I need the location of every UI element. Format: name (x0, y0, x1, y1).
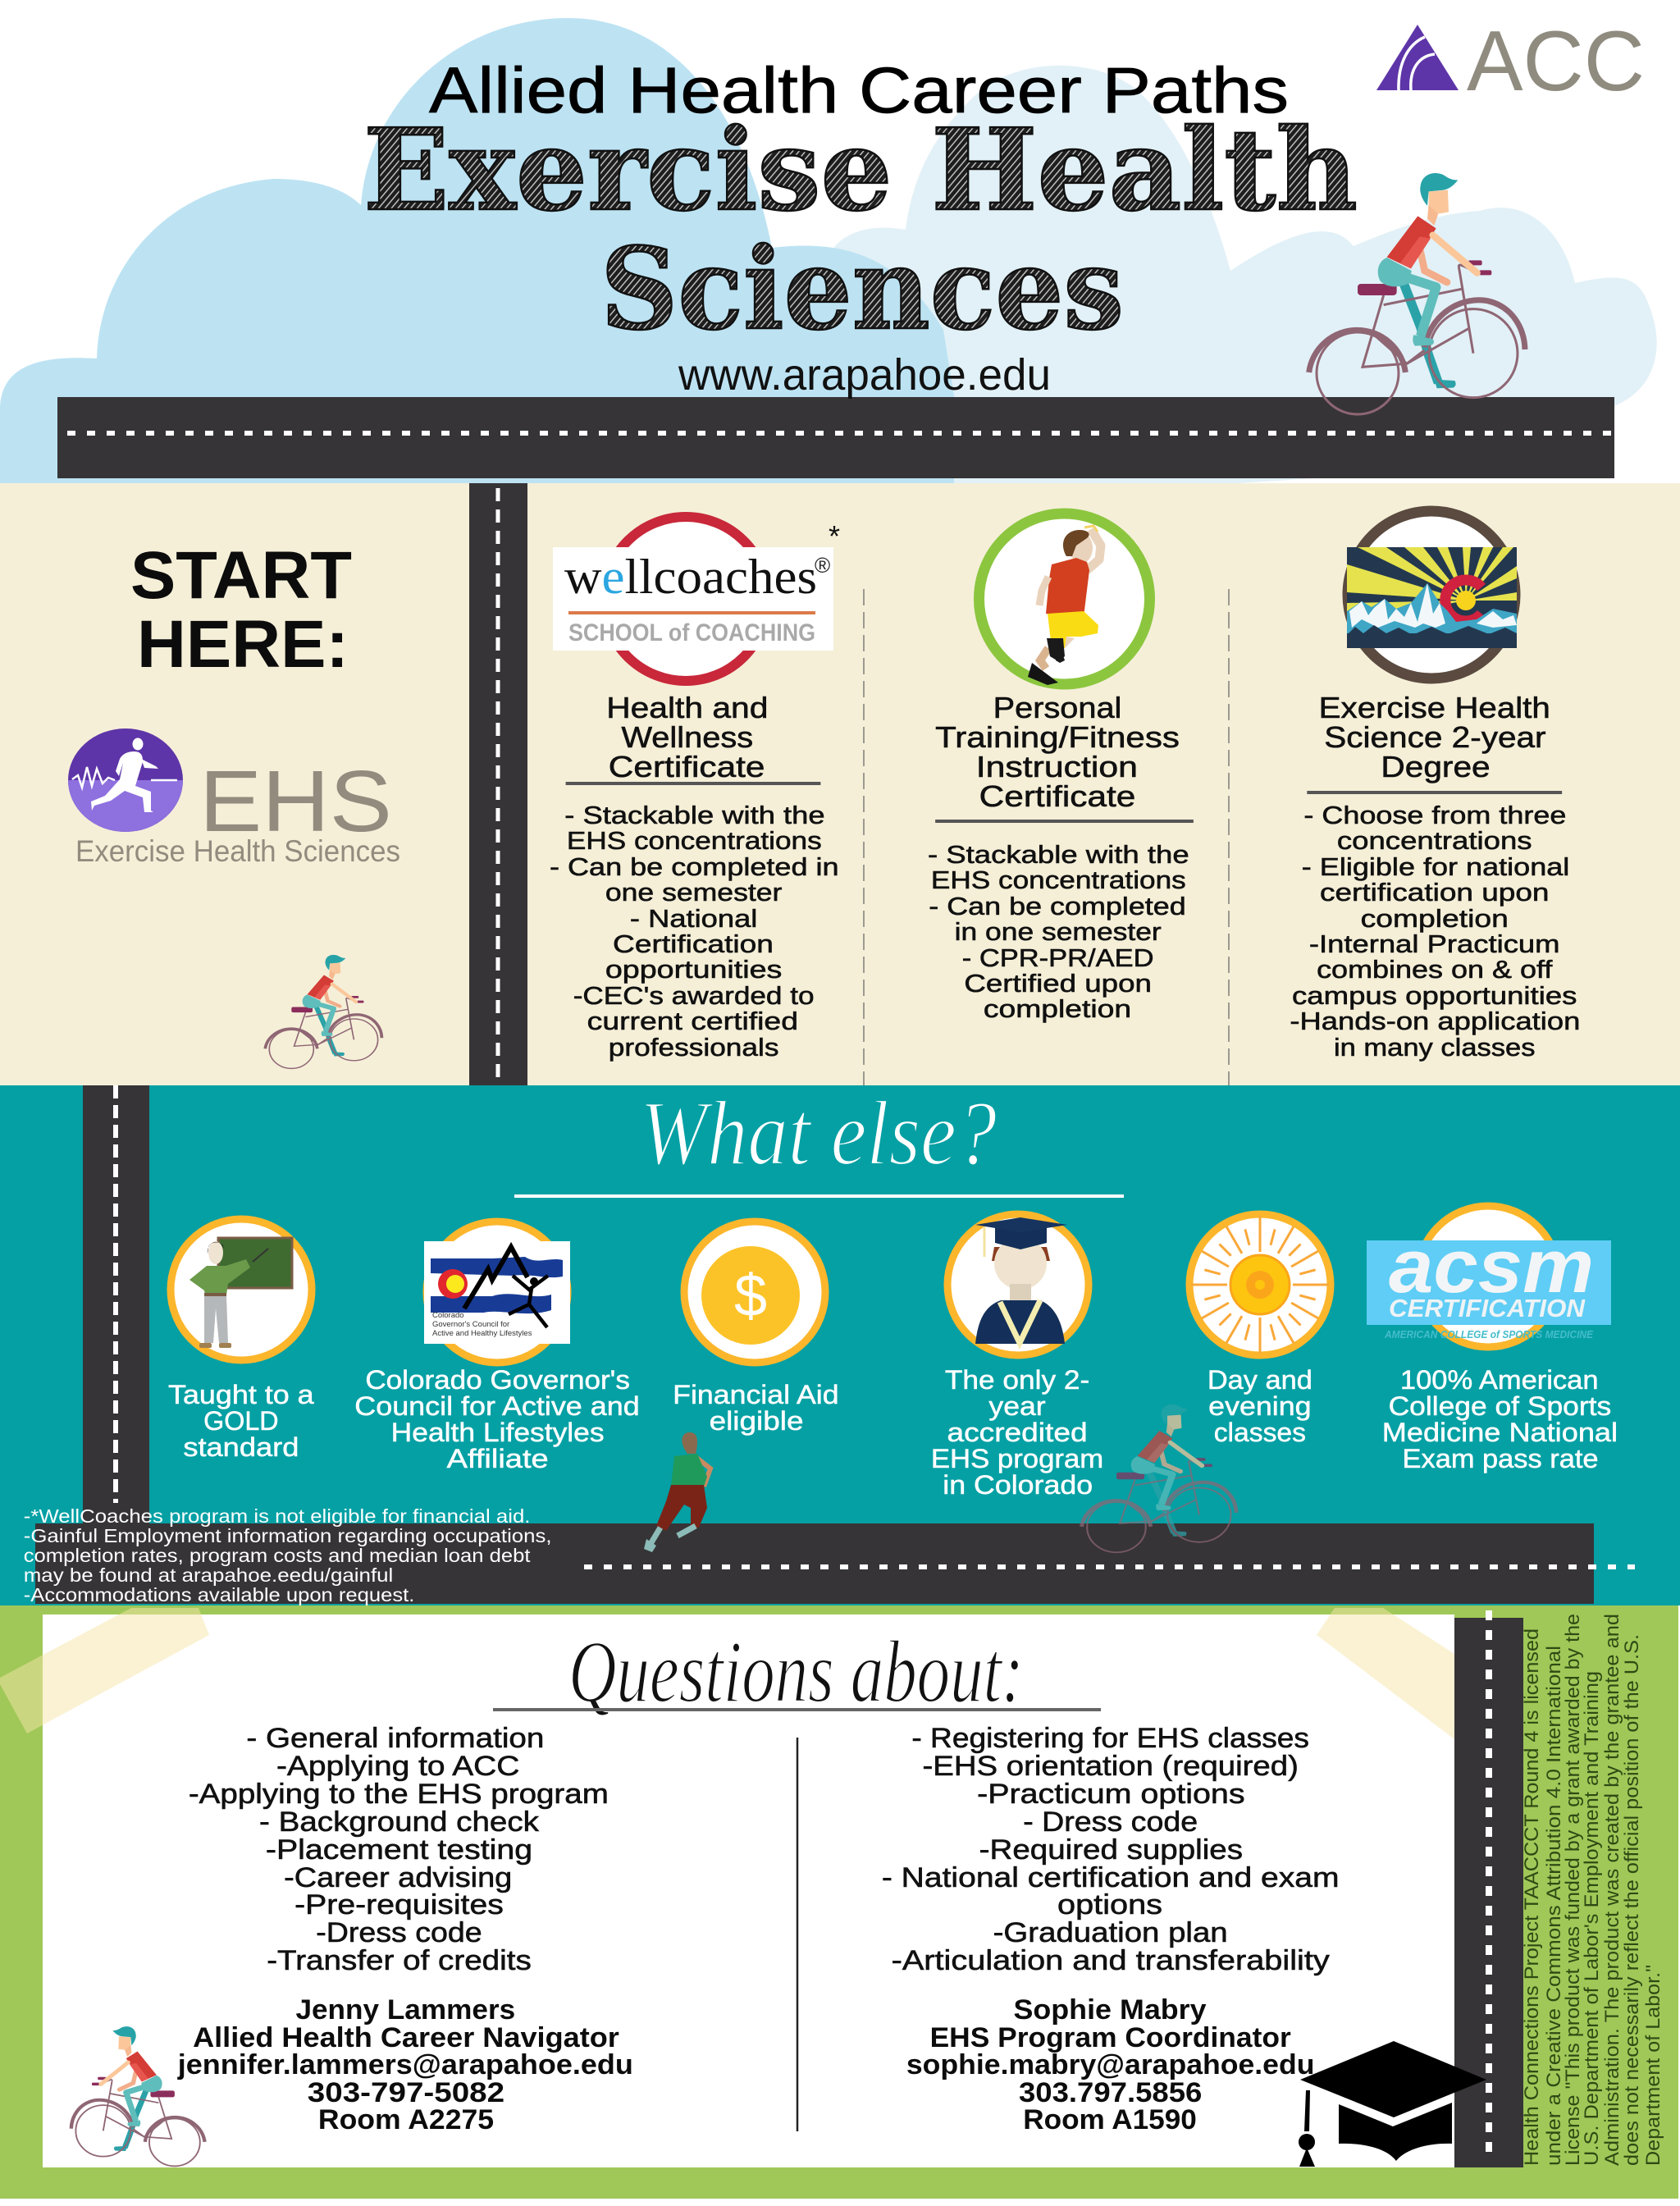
icon: acsm logo: CERTIFICATION (1389, 1294, 1586, 1322)
column 3 list: - Choose from three (1303, 801, 1566, 829)
column 2 list: - Stackable with the (928, 840, 1189, 869)
caption: governor's council: Affiliate (447, 1444, 549, 1473)
column 1 list: Certification (613, 929, 774, 958)
logo: EHS (66, 728, 400, 868)
column 3 list: - Eligible for national (1302, 852, 1569, 881)
list: right questions: -Required supplies (979, 1834, 1243, 1866)
list: left questions: -Career advising (284, 1862, 512, 1893)
column 2 heading: Instruction (976, 750, 1138, 783)
column 1 list: -CEC's awarded to (573, 981, 815, 1010)
column 1 list: opportunities (605, 955, 782, 984)
column 1 list: EHS concentrations (567, 826, 822, 855)
caption: financial aid: Financial Aid (673, 1380, 839, 1409)
icon: cyclist on road (1082, 1404, 1236, 1552)
icon: Colorado flag (1347, 511, 1517, 678)
footnote: -*WellCoaches program is not eligible for financial aid. (24, 1505, 530, 1527)
column 2 list: - Can be completed (929, 892, 1186, 920)
column 2 list: in one semester (955, 917, 1162, 946)
icon: sun (1189, 1214, 1331, 1355)
title (363, 104, 1358, 355)
column 3 list: in many classes (1334, 1033, 1535, 1062)
list: right questions: -Articulation and transferability (892, 1945, 1330, 1976)
caption: pass rate: College of Sports (1389, 1391, 1611, 1421)
icon: wellcoaches logo (553, 517, 840, 681)
logo: ACC: ACC (1467, 14, 1645, 109)
caption: gold standard: standard (183, 1432, 299, 1462)
contact: Jenny Lammers (177, 1994, 633, 2135)
caption: only program (931, 1365, 1103, 1500)
column 3 list: completion (1361, 904, 1509, 933)
footnote: may be found at arapahoe.eedu/gainful (24, 1564, 393, 1586)
list: right questions: - National certification and exam (882, 1862, 1340, 1893)
heading: start here (130, 538, 352, 682)
contact: Jenny Lammers: Jenny Lammers (295, 1994, 515, 2026)
column 3 heading (1319, 691, 1550, 783)
column 3 heading: Science 2-year (1324, 720, 1546, 754)
title: Sciences (600, 223, 1124, 355)
caption: pass rate: Medicine National (1382, 1418, 1618, 1447)
column 2 heading: Certificate (979, 779, 1135, 813)
contact: Jenny Lammers: Allied Health Career Navigator (193, 2022, 619, 2053)
heading: questions about: Questions about: (568, 1624, 1024, 1721)
icon: cyclist header (1309, 173, 1525, 414)
caption: day and evening: Day and (1208, 1365, 1312, 1395)
column 3 list: -Hands-on application (1290, 1007, 1580, 1035)
text: what else captions (24, 1365, 1618, 1605)
column 2 heading: Personal (993, 691, 1121, 724)
list: left questions: -Dress code (316, 1917, 482, 1948)
list: left questions: -Applying to ACC (276, 1751, 519, 1782)
heading: start here: HERE: (137, 607, 349, 682)
icon: teacher (171, 1219, 312, 1360)
column 2 list: completion (984, 994, 1131, 1023)
caption: only program: EHS program (931, 1444, 1103, 1473)
list: left questions: -Applying to the EHS program (189, 1779, 609, 1810)
contact: Sophie Mabry: 303.797.5856 (1019, 2077, 1202, 2108)
caption: governor's council: Health Lifestyles (391, 1418, 605, 1447)
list: right questions: -Graduation plan (993, 1917, 1228, 1948)
header background clouds (0, 18, 1657, 483)
column 1 list: - Can be completed in (550, 852, 839, 881)
list: right questions: -EHS orientation (required) (922, 1751, 1299, 1782)
caption: gold standard: GOLD (203, 1406, 279, 1436)
list: right questions (882, 1723, 1339, 1976)
title: Exercise Health (363, 104, 1358, 236)
column 1 heading: Health and (606, 691, 768, 724)
caption: financial aid: eligible (710, 1406, 803, 1436)
column 2 list: Certified upon (964, 969, 1152, 998)
subtitle: Allied Health Career Paths (429, 53, 1289, 126)
contact: Jenny Lammers: 303-797-5082 (308, 2077, 504, 2108)
icon: cyclist bottom left (71, 2026, 205, 2166)
column 1 heading: Certificate (609, 750, 765, 783)
caption: financial aid (673, 1380, 839, 1436)
caption: gold standard: Taught to a (168, 1380, 314, 1409)
contact: Jenny Lammers: jennifer.lammers@arapahoe.edu (177, 2049, 633, 2080)
website: www.arapahoe.edu (678, 350, 1051, 400)
column 2 heading (935, 691, 1180, 813)
heading: start here: START (130, 538, 352, 613)
column 3 list: campus opportunities (1292, 981, 1577, 1010)
column 1 list (550, 801, 839, 1062)
icon: runner woman (644, 1432, 710, 1552)
credits: grant statement: Department of Labor." (1642, 1965, 1664, 2166)
icon: dollar coin: $ (734, 1263, 767, 1329)
icon: acsm logo: acsm (1389, 1225, 1594, 1309)
logo: ACC (1376, 14, 1645, 109)
icon: wellcoaches logo: * (829, 519, 840, 553)
footnote: completion rates, program costs and median loan debt (24, 1545, 531, 1566)
heading: what else: What else? (640, 1083, 997, 1185)
column 1 list: professionals (609, 1033, 778, 1062)
list: left questions: -Pre-requisites (294, 1889, 504, 1921)
icon: wellcoaches logo: ® (815, 553, 830, 578)
list: left questions: -Placement testing (266, 1834, 532, 1866)
credits: grant statement: License "This product was funded by a grant awarded by the (1562, 1614, 1584, 2166)
icon: graduate (947, 1214, 1089, 1355)
column 3 heading: Degree (1381, 750, 1491, 783)
panel: start here (0, 483, 1680, 1085)
contact: Sophie Mabry (906, 1994, 1314, 2135)
footnote: -Gainful Employment information regarding occupations, (24, 1525, 552, 1546)
icon: Colorado council logo: Active and Healthy Lifestyles (432, 1329, 532, 1338)
list: left questions (189, 1723, 609, 1976)
column 3 list: combines on & off (1317, 955, 1553, 984)
caption: only program: The only 2- (945, 1365, 1089, 1395)
column 3 list: -Internal Practicum (1309, 929, 1560, 958)
list: right questions: options (1057, 1889, 1162, 1921)
text: column headings and lists (550, 691, 1580, 1062)
icon: Colorado council logo (424, 1222, 570, 1363)
credits: grant statement (1521, 1614, 1664, 2166)
column 3 heading: Exercise Health (1319, 691, 1550, 724)
header road (57, 397, 1614, 478)
column 1 list: - Stackable with the (564, 801, 825, 829)
panel: what else (0, 1083, 1680, 1605)
caption: only program: in Colorado (943, 1470, 1093, 1500)
caption: pass rate: 100% American (1400, 1365, 1599, 1395)
icon: small cyclist (265, 955, 381, 1068)
contact: Sophie Mabry: sophie.mabry@arapahoe.edu (906, 2049, 1314, 2080)
caption: only program: year (988, 1391, 1046, 1421)
caption: governor's council: Colorado Governor's (365, 1365, 630, 1395)
caption: pass rate (1382, 1365, 1618, 1473)
column 1 list: - National (630, 904, 757, 933)
icon: Colorado council logo: Colorado (432, 1311, 464, 1320)
column 1 heading (606, 691, 768, 783)
column 3 list: certification upon (1320, 878, 1549, 907)
icon: acsm logo (1367, 1206, 1611, 1347)
text: questions lists and contacts (177, 1723, 1340, 2135)
icon: acsm logo: AMERICAN COLLEGE of SPORTS MEDICINE (1384, 1328, 1593, 1340)
caption: day and evening: evening (1208, 1391, 1312, 1421)
list: right questions: - Registering for EHS classes (911, 1723, 1309, 1754)
column 1 list: one semester (605, 878, 782, 907)
icon: graduation cap (1299, 2041, 1486, 2167)
column 2 list (928, 840, 1189, 1023)
caption: only program: accredited (947, 1418, 1088, 1447)
column 2 list: - CPR-PR/AED (962, 943, 1154, 972)
list: left questions: - General information (246, 1723, 544, 1754)
caption: gold standard (168, 1380, 314, 1462)
footnote (24, 1505, 552, 1605)
contact: Sophie Mabry: EHS Program Coordinator (930, 2022, 1291, 2053)
column 3 list (1290, 801, 1580, 1062)
contact: Jenny Lammers: Room A2275 (318, 2104, 494, 2135)
footnote: -Accommodations available upon request. (24, 1584, 414, 1605)
logo: EHS: Exercise Health Sciences (75, 834, 400, 868)
caption: day and evening: classes (1214, 1418, 1306, 1447)
credits: grant statement: Health Connections Project TAACCCT Round 4 is licensed (1521, 1628, 1543, 2166)
column 2 heading: Training/Fitness (935, 720, 1180, 754)
icon: dollar coin (684, 1222, 825, 1363)
caption: day and evening (1208, 1365, 1312, 1447)
column 1 heading: Wellness (621, 720, 753, 754)
list: left questions: -Transfer of credits (267, 1945, 532, 1976)
column 2 list: EHS concentrations (931, 866, 1186, 894)
icon: runner boy (979, 514, 1150, 685)
contact: Sophie Mabry: Room A1590 (1023, 2104, 1197, 2135)
icon: wellcoaches logo: SCHOOL of COACHING (568, 619, 815, 646)
contact: Sophie Mabry: Sophie Mabry (1013, 1994, 1207, 2026)
caption: pass rate: Exam pass rate (1403, 1444, 1599, 1473)
credits: grant statement: Administration. The product was created by the grantee and (1601, 1614, 1623, 2166)
credits: grant statement: under a Creative Commons Attribution 4.0 International (1543, 1646, 1565, 2166)
credits: grant statement: U.S. Department of Labor's Employment and Training (1581, 1671, 1603, 2166)
caption: governor's council (354, 1365, 640, 1473)
list: right questions: -Practicum options (977, 1779, 1245, 1810)
credits: grant statement: does not necessarily reflect the official position of the U.S. (1621, 1634, 1643, 2166)
panel: questions (0, 1605, 1678, 2199)
column 1 list: current certified (587, 1007, 798, 1035)
column 3 list: concentrations (1337, 826, 1532, 855)
caption: governor's council: Council for Active and (354, 1391, 640, 1421)
logo: EHS: EHS (199, 753, 392, 850)
list: left questions: - Background check (259, 1806, 539, 1838)
icon: wellcoaches logo: wellcoaches (564, 550, 817, 604)
icon: Colorado council logo: Governor's Council for (432, 1320, 509, 1329)
list: right questions: - Dress code (1023, 1806, 1198, 1838)
